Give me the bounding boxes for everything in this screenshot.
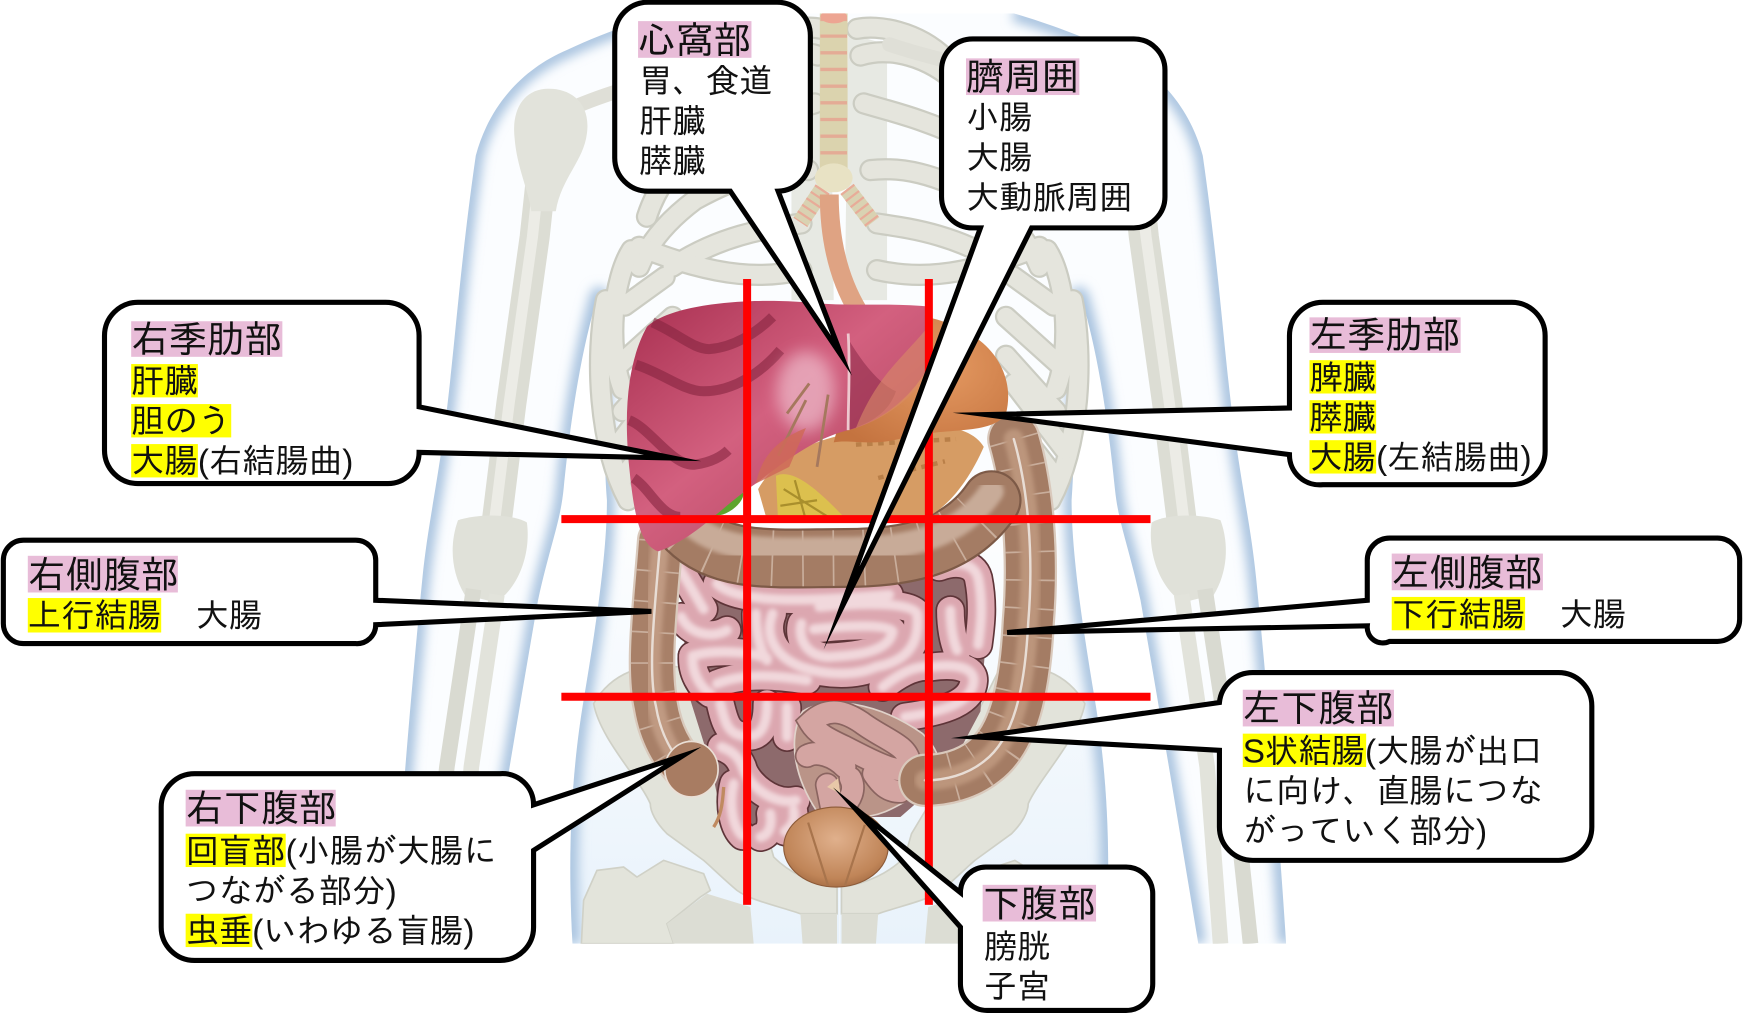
callout: 心窩部: [615, 2, 841, 356]
callout: 左下腹部: S状結腸(大腸が出口: [1243, 734, 1543, 771]
callout: 右季肋部: 大腸(右結腸曲): [131, 443, 353, 480]
callout: 心窩部: 胃、食道: [639, 63, 772, 100]
red grid lines dividing the abdomen: [561, 279, 1151, 905]
small intestine: [678, 561, 987, 847]
callout: 臍周囲: 大腸: [966, 140, 1033, 177]
esophagus: [829, 195, 858, 311]
callout: 臍周囲: 小腸: [966, 100, 1033, 137]
large intestine: [652, 439, 1030, 797]
callout: 左下腹部: がっていく部分): [1243, 814, 1487, 851]
trachea: [800, 10, 873, 222]
pancreas and duodenum: [758, 430, 984, 516]
callout: 左季肋部: [986, 302, 1545, 485]
callout: 右側腹部: [3, 540, 651, 644]
callout: 左下腹部: [977, 673, 1592, 860]
skeleton: [428, 10, 1251, 944]
callout: 左側腹部: [1007, 538, 1740, 643]
callout: 右側腹部: 右側腹部: [28, 555, 179, 597]
liver: [627, 301, 932, 551]
callout: 下腹部: 膀胱: [984, 929, 1050, 966]
callout: 右季肋部: 胆のう: [131, 403, 231, 440]
callout: 右側腹部: 大腸: [196, 598, 262, 635]
callout: 左季肋部: 膵臓: [1309, 400, 1376, 437]
callout: 心窩部: 心窩部: [638, 20, 751, 62]
callout: 左側腹部: 大腸: [1560, 597, 1626, 634]
callout: 右下腹部: 右下腹部: [186, 788, 337, 830]
bladder: [784, 807, 888, 887]
callout: 右下腹部: 虫垂(いわゆる盲腸): [186, 914, 474, 951]
callout: 右季肋部: 肝臓: [131, 363, 198, 400]
callout: 心窩部: 膵臓: [639, 143, 706, 180]
callout: 下腹部: 下腹部: [983, 884, 1096, 926]
callout: 下腹部: [855, 808, 1153, 1010]
gallbladder: [716, 492, 744, 516]
callout: 左下腹部: 左下腹部: [1243, 688, 1394, 730]
callout: 右側腹部: 上行結腸: [28, 598, 161, 635]
callout: 左側腹部: 下行結腸: [1392, 597, 1525, 634]
callout: 左側腹部: 左側腹部: [1392, 553, 1543, 595]
stomach: [834, 305, 1008, 442]
callout: 左季肋部: 大腸(左結腸曲): [1309, 440, 1532, 477]
callout: 左季肋部: 左季肋部: [1309, 315, 1461, 357]
callout: 右下腹部: つながる部分): [186, 874, 397, 911]
callout: 左季肋部: 脾臓: [1309, 360, 1376, 397]
callout: 左下腹部: に向け、直腸につな: [1243, 774, 1543, 811]
callout: 臍周囲: 大動脈周囲: [966, 180, 1133, 217]
cecum: [665, 741, 718, 797]
callout: 右季肋部: 右季肋部: [131, 319, 282, 361]
body silhouette: [384, 0, 1295, 956]
callout: 臍周囲: [841, 39, 1165, 608]
appendix: [714, 787, 724, 827]
callout: 下腹部: 子宮: [984, 969, 1050, 1006]
callout: 心窩部: 肝臓: [639, 103, 706, 140]
lower muted loops: [794, 703, 939, 817]
callout: 右下腹部: 回盲部(小腸が大腸に: [186, 834, 497, 871]
callout: 右下腹部: [161, 756, 683, 960]
anatomical illustration of the torso: [384, 0, 1295, 956]
callout: 臍周囲: 臍周囲: [966, 57, 1079, 99]
callout: 右季肋部: [105, 302, 673, 484]
